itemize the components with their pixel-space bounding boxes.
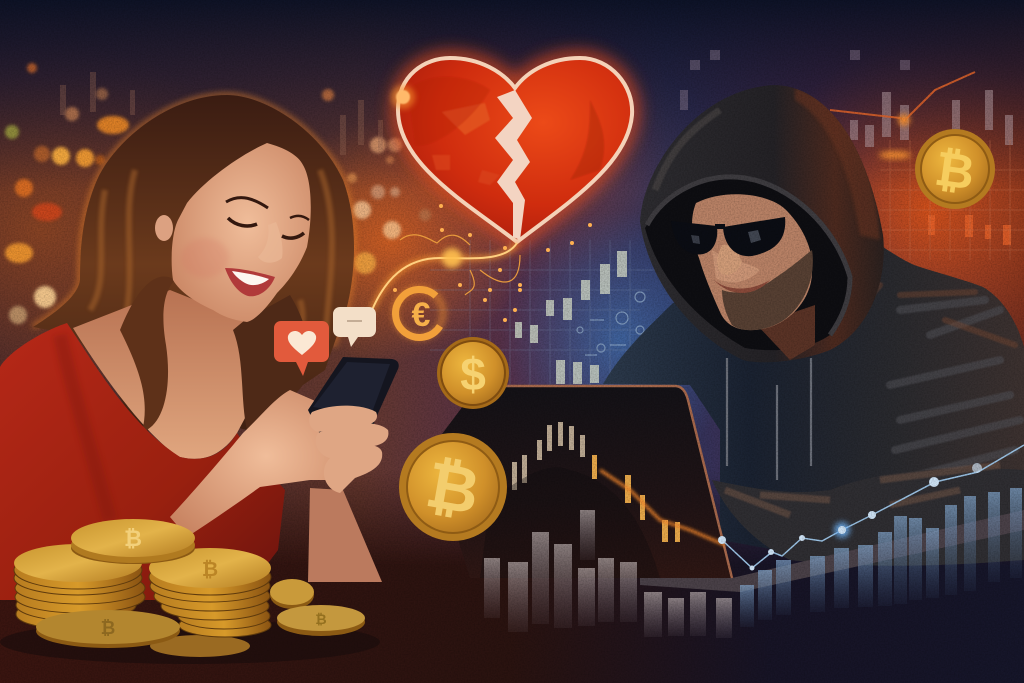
brows and eyes — [226, 198, 309, 238]
hair glow — [33, 95, 354, 347]
smile — [225, 268, 275, 296]
coin stacks: ₿ — [124, 526, 142, 551]
glowing swirl trail — [372, 85, 592, 322]
neck and chest — [73, 290, 260, 459]
hood inner shadow — [645, 177, 850, 350]
hooded man — [603, 85, 1024, 566]
central candlestick chart — [430, 240, 660, 400]
beard — [722, 250, 813, 330]
loose coins — [36, 614, 180, 648]
broken heart — [398, 58, 632, 242]
left stack — [14, 551, 145, 628]
coin stacks: ₿ — [315, 611, 327, 627]
coin: dollar — [437, 337, 509, 409]
coin: dollar: $ — [460, 348, 486, 400]
coin under stacks — [150, 635, 250, 657]
icon: glowing coin symbol — [395, 289, 443, 337]
hoodie strings and zip — [727, 358, 811, 480]
neck — [757, 305, 815, 360]
hoodie body — [603, 247, 1024, 565]
sleeve stripes — [890, 300, 1020, 480]
bokeh lights — [5, 63, 431, 324]
coin: large bitcoin — [399, 433, 507, 541]
coin: bitcoin top right: ₿ — [932, 143, 978, 200]
hair highlights — [90, 170, 332, 420]
woman — [0, 95, 399, 600]
hood rim — [647, 177, 850, 335]
table shadow — [0, 620, 380, 664]
nose — [258, 222, 283, 263]
crack — [495, 90, 532, 240]
bottom bar chart — [484, 445, 1024, 638]
icon: glowing coin symbol: € — [412, 296, 431, 334]
face — [692, 194, 812, 330]
red top — [0, 323, 285, 600]
hood — [640, 85, 884, 362]
hood highlights — [655, 88, 880, 240]
coin: large bitcoin: ₿ — [421, 448, 485, 528]
nose — [717, 245, 742, 275]
ear — [155, 215, 173, 241]
forearms on keyboard — [712, 468, 1024, 566]
top coin — [71, 532, 195, 564]
coin stacks: ₿ — [202, 559, 218, 581]
sunglasses — [671, 217, 785, 256]
hair back — [33, 95, 354, 433]
market data background, right — [680, 50, 1024, 260]
icon: heart speech bubble — [274, 321, 329, 376]
sleeve detail — [725, 465, 1000, 515]
fingers — [309, 406, 388, 493]
forehead and cheek light — [712, 250, 760, 283]
arm — [170, 390, 345, 537]
rising line — [722, 445, 1024, 568]
laptop — [430, 386, 1024, 592]
coin stacks — [0, 519, 380, 664]
coin stacks: ₿ — [101, 618, 115, 638]
heart texture patches — [408, 77, 604, 185]
phone — [308, 357, 399, 470]
coin: bitcoin top right — [915, 129, 995, 209]
right stack — [149, 559, 271, 637]
dark mountain silhouette on screen — [480, 467, 660, 578]
face — [172, 143, 311, 322]
front hair strands — [120, 277, 175, 432]
second forearm — [308, 488, 382, 582]
icon: chat bubble — [333, 307, 376, 347]
cheek blush — [181, 238, 229, 278]
market data background, left — [60, 72, 383, 155]
smile — [713, 279, 770, 293]
